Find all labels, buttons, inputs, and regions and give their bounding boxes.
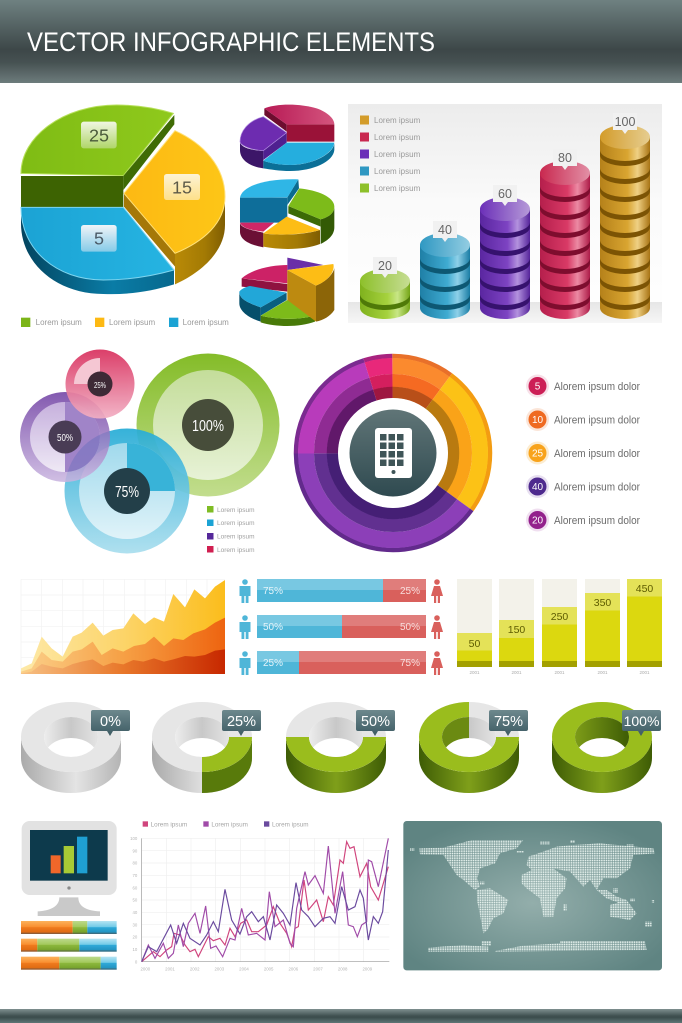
circle 50% — [20, 392, 110, 482]
circle 50%: 50% — [57, 433, 73, 444]
panel: 3D pie charts — [21, 105, 334, 327]
pie legend: Lorem ipsum — [183, 318, 229, 327]
map dots — [410, 840, 655, 952]
line chart: 2004 — [239, 967, 249, 972]
column 50: 2001 — [469, 670, 480, 675]
column 40: 40 — [438, 223, 452, 237]
line chart: 2002 — [190, 967, 200, 972]
row 75/25: 25% — [400, 586, 420, 597]
circles legend: Lorem ipsum — [217, 520, 255, 527]
circle 75%: 75% — [115, 484, 139, 501]
legend item 40: Alorem ipsum dolor — [554, 482, 640, 494]
stack legend: Lorem ipsum — [374, 133, 421, 142]
value tile 5 — [81, 225, 117, 252]
panel: monitor and line chart — [21, 821, 389, 972]
line chart: 2009 — [363, 967, 373, 972]
circle 100%: 100% — [192, 418, 224, 435]
line chart: 30 — [133, 922, 138, 927]
column 20 — [360, 257, 410, 319]
legend item 5: 5 — [535, 382, 541, 392]
pie legend: Lorem ipsum — [109, 318, 155, 327]
line chart: 80 — [133, 861, 138, 866]
legend item 5: Alorem ipsum dolor — [554, 381, 640, 393]
value tile 25: 25 — [89, 125, 109, 145]
donut 50%: 50% — [361, 714, 390, 730]
line chart: 90 — [133, 848, 138, 853]
panel: gender comparison bars — [240, 579, 443, 675]
column 40 — [420, 221, 470, 319]
panel: percentage circles — [20, 350, 280, 554]
title: VECTOR INFOGRAPHIC ELEMENTS — [27, 27, 435, 57]
circles legend — [207, 506, 255, 554]
line chart legend: Lorem ipsum — [272, 822, 309, 829]
panel: dotted world map — [403, 821, 662, 970]
donut 25%: 25% — [227, 714, 256, 730]
stack legend: Lorem ipsum — [374, 116, 421, 125]
row 25/75: 25% — [263, 658, 283, 669]
legend item 25: 25 — [532, 448, 543, 460]
column 100 — [600, 113, 650, 319]
line chart: 2006 — [289, 967, 299, 972]
line chart: 60 — [133, 885, 138, 890]
line chart: 50 — [133, 898, 138, 903]
footer band — [0, 1009, 682, 1023]
column 350: 350 — [594, 597, 611, 609]
legend item 10 — [526, 408, 640, 431]
line chart legend: Lorem ipsum — [211, 822, 248, 829]
panel: stacked disc column chart — [348, 104, 662, 323]
column 150 — [499, 579, 534, 675]
column 60: 60 — [498, 187, 512, 201]
line chart: 40 — [133, 910, 138, 915]
header banner — [0, 0, 682, 83]
column 150: 2001 — [511, 670, 522, 675]
column 50: 50 — [469, 638, 480, 650]
small pie 1 — [240, 105, 334, 171]
row 75/25 — [240, 579, 443, 603]
pie legend — [21, 318, 229, 327]
donut 75%: 75% — [494, 714, 523, 730]
line chart: 2007 — [313, 967, 323, 972]
circles legend: Lorem ipsum — [217, 507, 255, 514]
circles legend: Lorem ipsum — [217, 534, 255, 540]
column 150: 150 — [508, 624, 525, 636]
small pie 3 — [239, 258, 334, 326]
line chart: 2005 — [264, 967, 274, 972]
pie legend: Lorem ipsum — [36, 318, 82, 327]
column 250 — [542, 579, 577, 675]
line chart: 2003 — [215, 967, 225, 972]
value tile 15: 15 — [172, 178, 192, 198]
donut 100%: 100% — [624, 713, 659, 729]
icon: tablet — [375, 428, 412, 478]
legend item 40 — [526, 475, 640, 498]
stack legend: Lorem ipsum — [374, 167, 421, 176]
column 450: 2001 — [639, 670, 650, 675]
line chart legend: Lorem ipsum — [151, 822, 187, 829]
column 20: 20 — [378, 259, 392, 273]
legend item 25 — [526, 442, 640, 464]
column 450 — [627, 579, 662, 675]
line chart — [130, 821, 389, 972]
panel: segmented ring chart — [296, 356, 640, 550]
line chart: 10 — [133, 947, 138, 952]
legend item 20 — [526, 508, 640, 532]
row 50/50: 50% — [400, 622, 420, 633]
stack legend: Lorem ipsum — [374, 184, 421, 193]
circles legend: Lorem ipsum — [217, 547, 255, 554]
donut 50% — [286, 702, 395, 793]
stack legend: Lorem ipsum — [374, 150, 421, 159]
donut 25% — [152, 702, 261, 793]
column 450: 450 — [636, 583, 653, 595]
circle 25%: 25% — [94, 381, 106, 390]
row 25/75 — [240, 651, 443, 675]
value tile 5: 5 — [94, 229, 104, 249]
ring segments — [296, 356, 490, 550]
line chart: 100 — [130, 836, 138, 841]
ring legend — [526, 374, 640, 532]
column 350: 2001 — [597, 670, 608, 675]
stack legend — [360, 116, 421, 193]
donut 75% — [419, 702, 528, 793]
line chart: 2008 — [338, 967, 348, 972]
value tile 15 — [164, 174, 200, 200]
small pie 2 — [240, 179, 334, 249]
circle 100% — [136, 354, 280, 496]
column 60 — [480, 185, 530, 319]
panel: yellow column chart — [457, 579, 662, 675]
circle 25% — [66, 350, 134, 418]
area chart — [21, 579, 225, 674]
donut 0% — [21, 702, 130, 793]
row 50/50: 50% — [263, 622, 283, 633]
line chart: 2001 — [165, 967, 175, 972]
large 3D pie chart — [21, 105, 225, 294]
column 80 — [540, 149, 590, 319]
donut 100% — [552, 702, 661, 793]
row 75/25: 75% — [263, 586, 283, 597]
column 80: 80 — [558, 151, 572, 165]
line chart: 20 — [133, 935, 138, 940]
column 250: 2001 — [554, 670, 565, 675]
line chart: 2000 — [141, 967, 151, 972]
icon: computer monitor — [22, 821, 117, 916]
legend item 10: Alorem ipsum dolor — [554, 414, 640, 426]
panel: 3D donut progress row — [21, 702, 661, 793]
legend item 20: 20 — [532, 516, 543, 526]
column 50 — [457, 579, 492, 675]
line chart: 70 — [133, 873, 138, 878]
row 25/75: 75% — [400, 658, 420, 669]
column 100: 100 — [615, 115, 635, 129]
legend item 25: Alorem ipsum dolor — [554, 448, 640, 460]
line chart: 0 — [135, 959, 138, 964]
legend item 5 — [526, 374, 640, 398]
column 350 — [585, 579, 620, 675]
row 50/50 — [240, 615, 443, 639]
progress bars — [21, 921, 117, 970]
line chart legend — [143, 821, 309, 829]
legend item 20: Alorem ipsum dolor — [554, 515, 640, 527]
donut 0%: 0% — [100, 714, 121, 730]
value tile 25 — [81, 122, 117, 148]
legend item 10: 10 — [532, 415, 543, 426]
legend item 40: 40 — [532, 482, 543, 493]
column 250: 250 — [551, 611, 568, 623]
circle 75% — [64, 428, 190, 554]
